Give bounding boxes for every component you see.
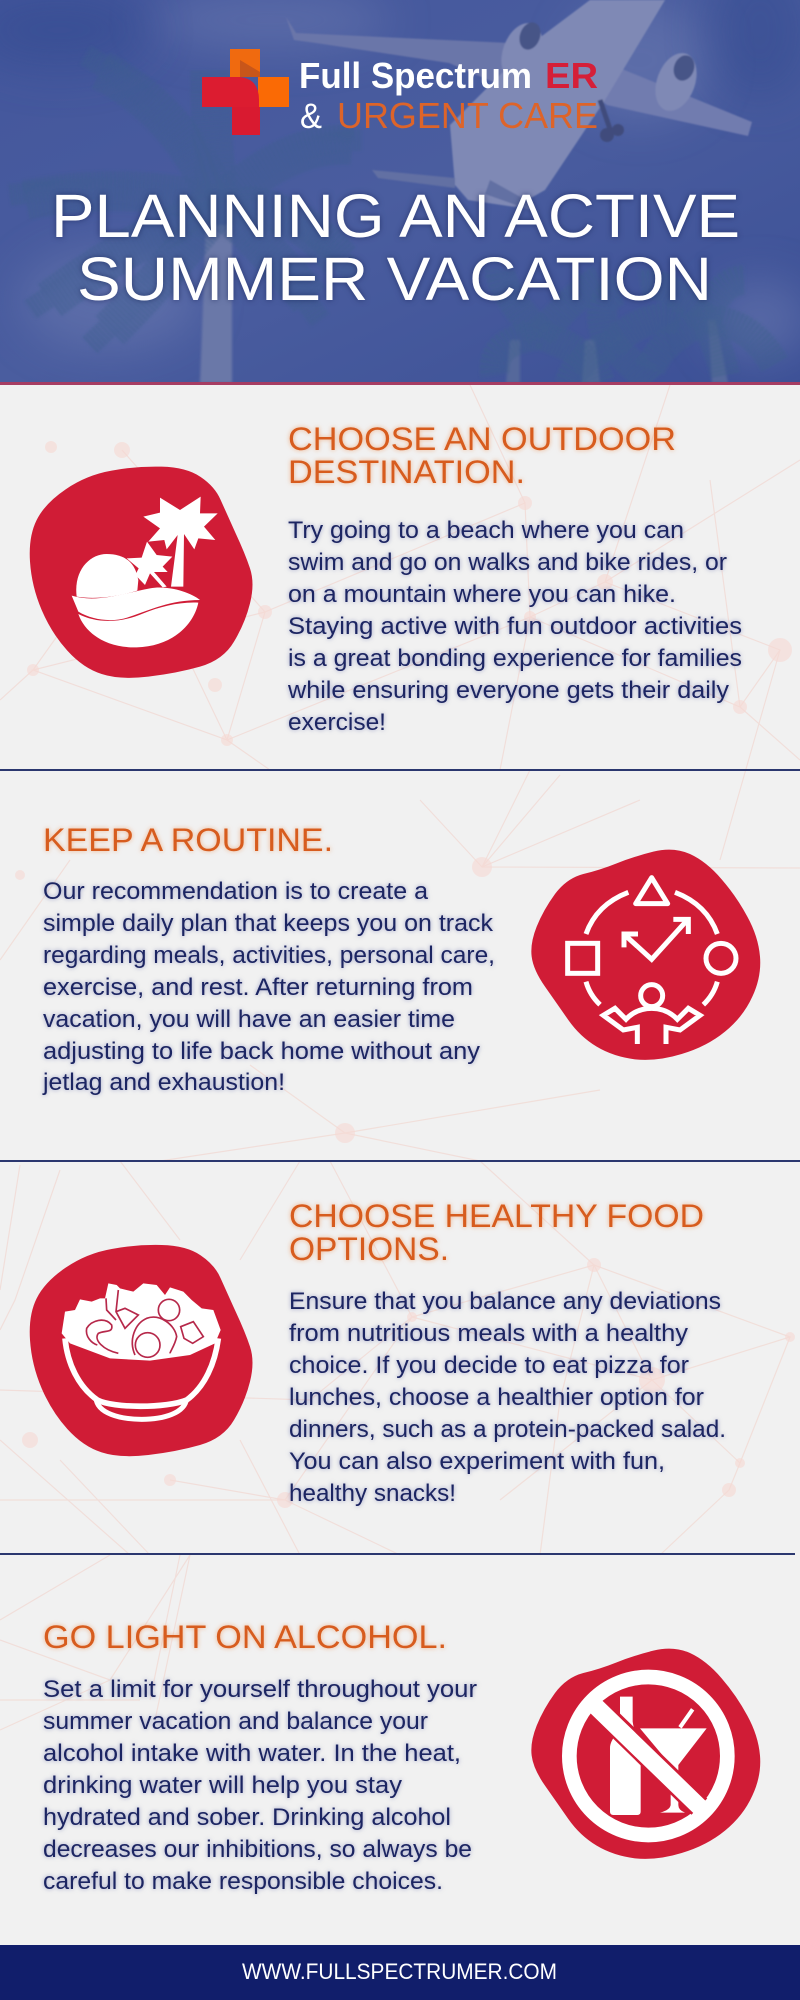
body text: outdoor destination: Staying active with fun outdoor activities [288,613,742,640]
body text: alcohol: alcohol intake with water. In the heat, [43,1740,461,1767]
body text: healthy food: dinners, such as a protein-packed salad. [289,1416,726,1443]
body text: keep a routine [42,878,495,1096]
photo: airplane [286,0,752,210]
body text: alcohol: drinking water will help you stay [43,1772,403,1799]
heading: choose healthy food options: CHOOSE HEALTHY FOOD [289,1198,704,1234]
body text: outdoor destination [287,517,742,736]
body text: outdoor destination: on a mountain where you can hike. [288,581,676,608]
panel: outdoor destination [30,421,742,736]
body text: healthy food [289,1288,726,1507]
logo wordmark [299,55,598,136]
logo wordmark: Full Spectrum [299,55,532,96]
heading: choose healthy food options: OPTIONS. [289,1231,449,1267]
logo wordmark: ER [545,55,598,96]
body text: alcohol: decreases our inhibitions, so always be [43,1836,472,1863]
body text: keep a routine: regarding meals, activities, personal care, [43,942,495,969]
footer url: WWW.FULLSPECTRUMER.COM [242,1959,557,1984]
body text: healthy food: lunches, choose a healthier option for [289,1384,704,1411]
icon: juggling routine shapes [531,850,760,1060]
body text: keep a routine: vacation, you will have an easier time [43,1006,455,1033]
body text: healthy food: Ensure that you balance any deviations [289,1288,721,1315]
panel: keep a routine [42,822,760,1096]
title [51,182,740,313]
body text: alcohol: summer vacation and balance your [43,1708,428,1735]
title: SUMMER VACATION [77,245,712,313]
body text: healthy food: healthy snacks! [289,1480,456,1507]
logo [202,49,598,136]
body text: outdoor destination: while ensuring everyone gets their daily [287,677,730,704]
body text: keep a routine: adjusting to life back home without any [43,1038,481,1065]
heading: choose healthy food options [289,1198,704,1267]
background network pattern [0,385,800,1730]
body text: outdoor destination: Try going to a beach where you can [288,517,684,544]
body text: healthy food: You can also experiment with fun, [289,1448,665,1475]
title: PLANNING AN ACTIVE [51,182,740,250]
body text: keep a routine: jetlag and exhaustion! [42,1069,285,1096]
body text: keep a routine: simple daily plan that keeps you on track [43,910,494,937]
photo: left palm tree [22,121,354,382]
body text: keep a routine: Our recommendation is to create a [43,878,428,905]
photo: right palm trees [495,270,775,383]
logo wordmark: & [300,97,322,136]
header rule [0,382,800,385]
body text: alcohol: careful to make responsible choices. [43,1868,443,1895]
heading: go light on alcohol: GO LIGHT ON ALCOHOL. [43,1619,447,1655]
body text: alcohol: hydrated and sober. Drinking alcohol [43,1804,451,1831]
icon: salad bowl [30,1245,252,1456]
header banner [0,0,800,383]
heading: choose an outdoor destination: DESTINATION. [288,454,525,490]
body text: healthy food: from nutritious meals with a healthy [289,1320,689,1347]
icon: island with palm trees [30,467,252,678]
footer bar [0,1945,800,2000]
heading: choose an outdoor destination [288,421,676,490]
body text: outdoor destination: swim and go on walks and bike rides, or [288,549,727,576]
heading: keep a routine: KEEP A ROUTINE. [43,822,333,858]
panel: go light on alcohol [43,1619,760,1895]
body text: outdoor destination: exercise! [288,709,386,736]
logo mark: cross [202,49,289,135]
icon: no alcohol [531,1649,760,1859]
body text: outdoor destination: is a great bonding experience for families [288,645,742,672]
body text: healthy food: choice. If you decide to eat pizza for [289,1352,689,1379]
logo wordmark: URGENT CARE [337,95,598,136]
body text: alcohol: Set a limit for yourself throughout your [43,1676,477,1703]
panel: healthy food [30,1198,726,1507]
body text: keep a routine: exercise, and rest. After returning from [43,974,473,1001]
body text: alcohol [43,1676,477,1895]
heading: choose an outdoor destination: CHOOSE AN OUTDOOR [288,421,676,457]
